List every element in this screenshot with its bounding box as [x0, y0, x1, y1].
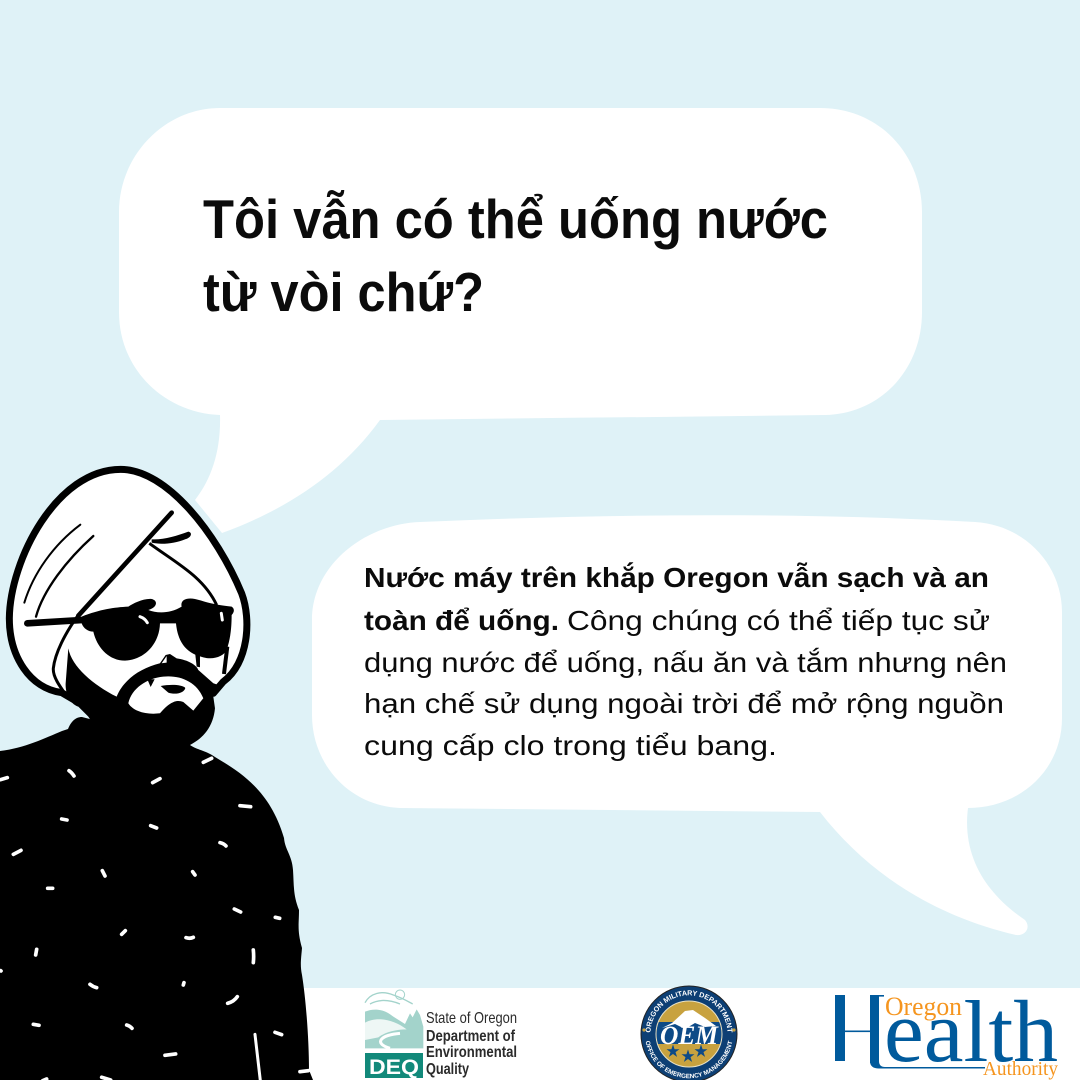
turban crease left inner: [36, 536, 93, 617]
mouth: [161, 685, 185, 694]
chin white patch: [128, 676, 203, 714]
question heading: từ vòi chứ?: [203, 261, 484, 323]
OHA word Authority: Authority: [983, 1058, 1058, 1080]
question heading: [203, 188, 828, 323]
answer text: cung cấp clo trong tiểu bang.: [364, 730, 777, 761]
sunglasses arm: [27, 620, 83, 623]
answer speech bubble: [312, 515, 1062, 935]
illustration: man with turban and sunglasses: [0, 469, 313, 1080]
seal letters: OEM: [660, 1021, 719, 1050]
DEQ box: [365, 1053, 423, 1078]
logo: Oregon DEQ: DEQ: [369, 1056, 419, 1079]
right temple strip: [224, 647, 227, 674]
turban crease left outer: [24, 525, 80, 603]
seal ring text: OFFICE OF EMERGENCY MANAGEMENT: [646, 1040, 732, 1078]
seal stars: ★: [694, 1043, 708, 1059]
logo: Oregon Health Authority: [835, 984, 1058, 1080]
DEQ wordmark: State of Oregon: [426, 1010, 517, 1027]
turban fold line lower: [53, 615, 78, 695]
seal stars: ★: [681, 1048, 695, 1064]
seal ring text: [646, 990, 733, 1078]
seal stars: [666, 1043, 708, 1064]
turban end tuck: [152, 532, 191, 544]
logo: Oregon DEQ: [365, 990, 517, 1079]
turban: [9, 469, 247, 703]
answer text: toàn để uống.: [364, 605, 559, 636]
turban crease right: [149, 543, 217, 605]
DEQ wordmark: [426, 1010, 517, 1078]
question speech bubble: [119, 108, 922, 533]
nose highlight: [162, 656, 167, 663]
head: [9, 469, 247, 750]
sunglasses: [82, 599, 234, 661]
shirt speckles: [1, 758, 308, 1080]
OHA word Oregon: Oregon: [885, 992, 962, 1021]
DEQ landscape: [365, 990, 423, 1048]
seal ring text: OREGON MILITARY DEPARTMENT: [646, 990, 733, 1032]
answer text: hạn chế sử dụng ngoài trời để mở rộng nguồn: [364, 688, 1004, 719]
OHA word Health: ealth: [884, 984, 1058, 1080]
seal ring dots: [642, 1028, 736, 1032]
seal mountain: [662, 1010, 716, 1029]
body: black patterned shirt: [0, 717, 313, 1080]
OHA H letterform: [835, 995, 985, 1068]
turban fold line upper: [78, 513, 172, 616]
DEQ wordmark: Quality: [426, 1061, 469, 1078]
question heading: Tôi vẫn có thể uống nước: [203, 188, 828, 250]
logo: Oregon Military Department OEM seal: [640, 986, 738, 1080]
seal stars: ★: [666, 1043, 680, 1059]
beard and face: [66, 648, 218, 750]
lens highlights: [140, 613, 222, 623]
answer text: [364, 562, 1007, 761]
DEQ wordmark: Environmental: [426, 1044, 517, 1061]
DEQ wordmark: Department of: [426, 1028, 516, 1045]
answer text: Công chúng có thể tiếp tục sử: [567, 605, 990, 636]
answer text: dụng nước để uống, nấu ăn và tắm nhưng nên: [364, 647, 1007, 678]
answer text: Nước máy trên khắp Oregon vẫn sạch và an: [364, 562, 989, 593]
cheek mark: [195, 652, 200, 667]
seal blue band: [655, 1022, 723, 1044]
